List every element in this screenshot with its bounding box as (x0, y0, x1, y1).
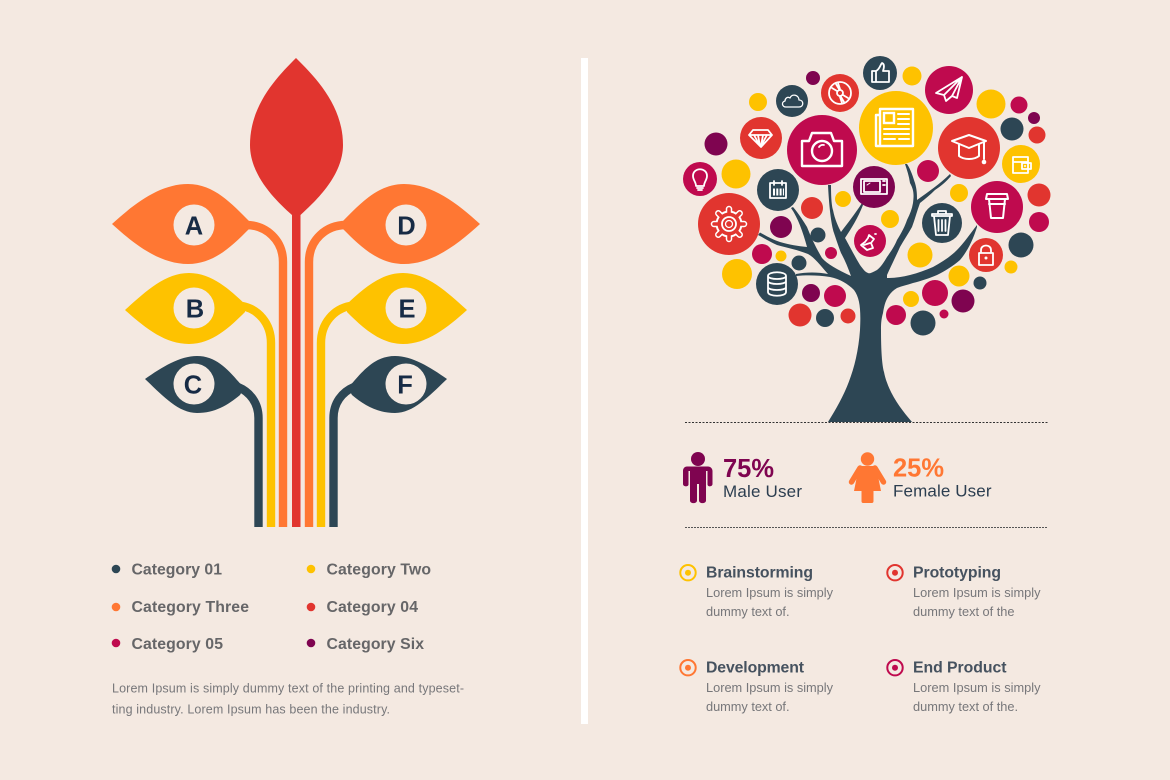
step: Development (680, 660, 834, 714)
icon: female figure (852, 452, 884, 503)
icon: disc (821, 74, 859, 112)
leaf C: C (184, 372, 202, 400)
step: Brainstorming (680, 564, 834, 619)
female user stat: Female User (893, 482, 992, 500)
legend item: Category 05: Category 05 (132, 636, 223, 653)
leaf E: E (398, 296, 416, 324)
female user stat (852, 452, 992, 503)
icon: trash can (922, 203, 962, 243)
step: Brainstorming: Lorem Ipsum is simply (706, 585, 834, 600)
leaf F (334, 356, 447, 527)
leaf A (112, 184, 283, 527)
leaf B: B (186, 296, 204, 324)
left leaf diagram (112, 58, 480, 527)
legend item: Category 04: Category 04 (326, 599, 418, 616)
icon: coffee cup (971, 181, 1023, 233)
step: Brainstorming: Brainstorming (706, 564, 813, 582)
icon: graduation cap (938, 117, 1000, 179)
leaf F: F (397, 372, 413, 400)
dotted baseline (685, 422, 1048, 424)
icon: flask (854, 225, 886, 257)
tree (683, 56, 1050, 422)
icon: paper plane (925, 66, 973, 114)
icon: thumbs up (863, 56, 897, 90)
female user stat: 25% (893, 454, 944, 482)
male user stat (683, 452, 802, 503)
step: End Product: Lorem Ipsum is simply (913, 680, 1041, 695)
left paragraph: ting industry. Lorem Ipsum has been the industry. (112, 702, 390, 716)
leaf C (145, 356, 258, 527)
tree trunk and branches (758, 164, 977, 422)
male user stat: Male User (723, 482, 802, 501)
icon: television (853, 166, 895, 208)
legend item: Category 01: Category 01 (132, 562, 222, 578)
step: Development: Development (706, 660, 805, 677)
leaf D: D (397, 212, 416, 240)
icon: male figure (683, 452, 712, 503)
step: End Product (887, 660, 1041, 714)
leaf A: A (185, 212, 203, 240)
icon: light bulb (683, 162, 717, 196)
legend item: Category Two: Category Two (326, 562, 431, 578)
legend (112, 562, 431, 653)
icon: gear (698, 193, 760, 255)
step: Prototyping: Lorem Ipsum is simply (913, 585, 1041, 600)
legend item: Category Six: Category Six (326, 636, 424, 653)
male user stat: 75% (723, 455, 774, 483)
left paragraph: Lorem Ipsum is simply dummy text of the printing and typeset- (112, 682, 464, 696)
step: Development: dummy text of. (706, 699, 790, 714)
plain circles (704, 66, 1050, 336)
red centre leaf and stem (250, 58, 343, 527)
icon: diamond (740, 117, 782, 159)
step: Prototyping: dummy text of the (913, 604, 1014, 619)
leaf E (321, 273, 467, 527)
icon: calendar (757, 169, 799, 211)
icon: wallet (1002, 145, 1040, 183)
step: End Product: dummy text of the. (913, 699, 1018, 714)
step: Prototyping: Prototyping (913, 564, 1001, 582)
legend item: Category Three: Category Three (132, 599, 249, 616)
step: Brainstorming: dummy text of. (706, 604, 790, 619)
leaf D (309, 184, 480, 527)
step: End Product: End Product (913, 660, 1007, 677)
step: Development: Lorem Ipsum is simply (706, 680, 834, 695)
icon: database (756, 263, 798, 305)
leaf B (125, 273, 271, 527)
left paragraph (112, 682, 464, 716)
icon: newspaper (859, 91, 933, 165)
icon: cloud (776, 85, 808, 117)
icon: lock (969, 238, 1003, 272)
step: Prototyping (887, 564, 1041, 619)
icon: camera (787, 115, 857, 185)
